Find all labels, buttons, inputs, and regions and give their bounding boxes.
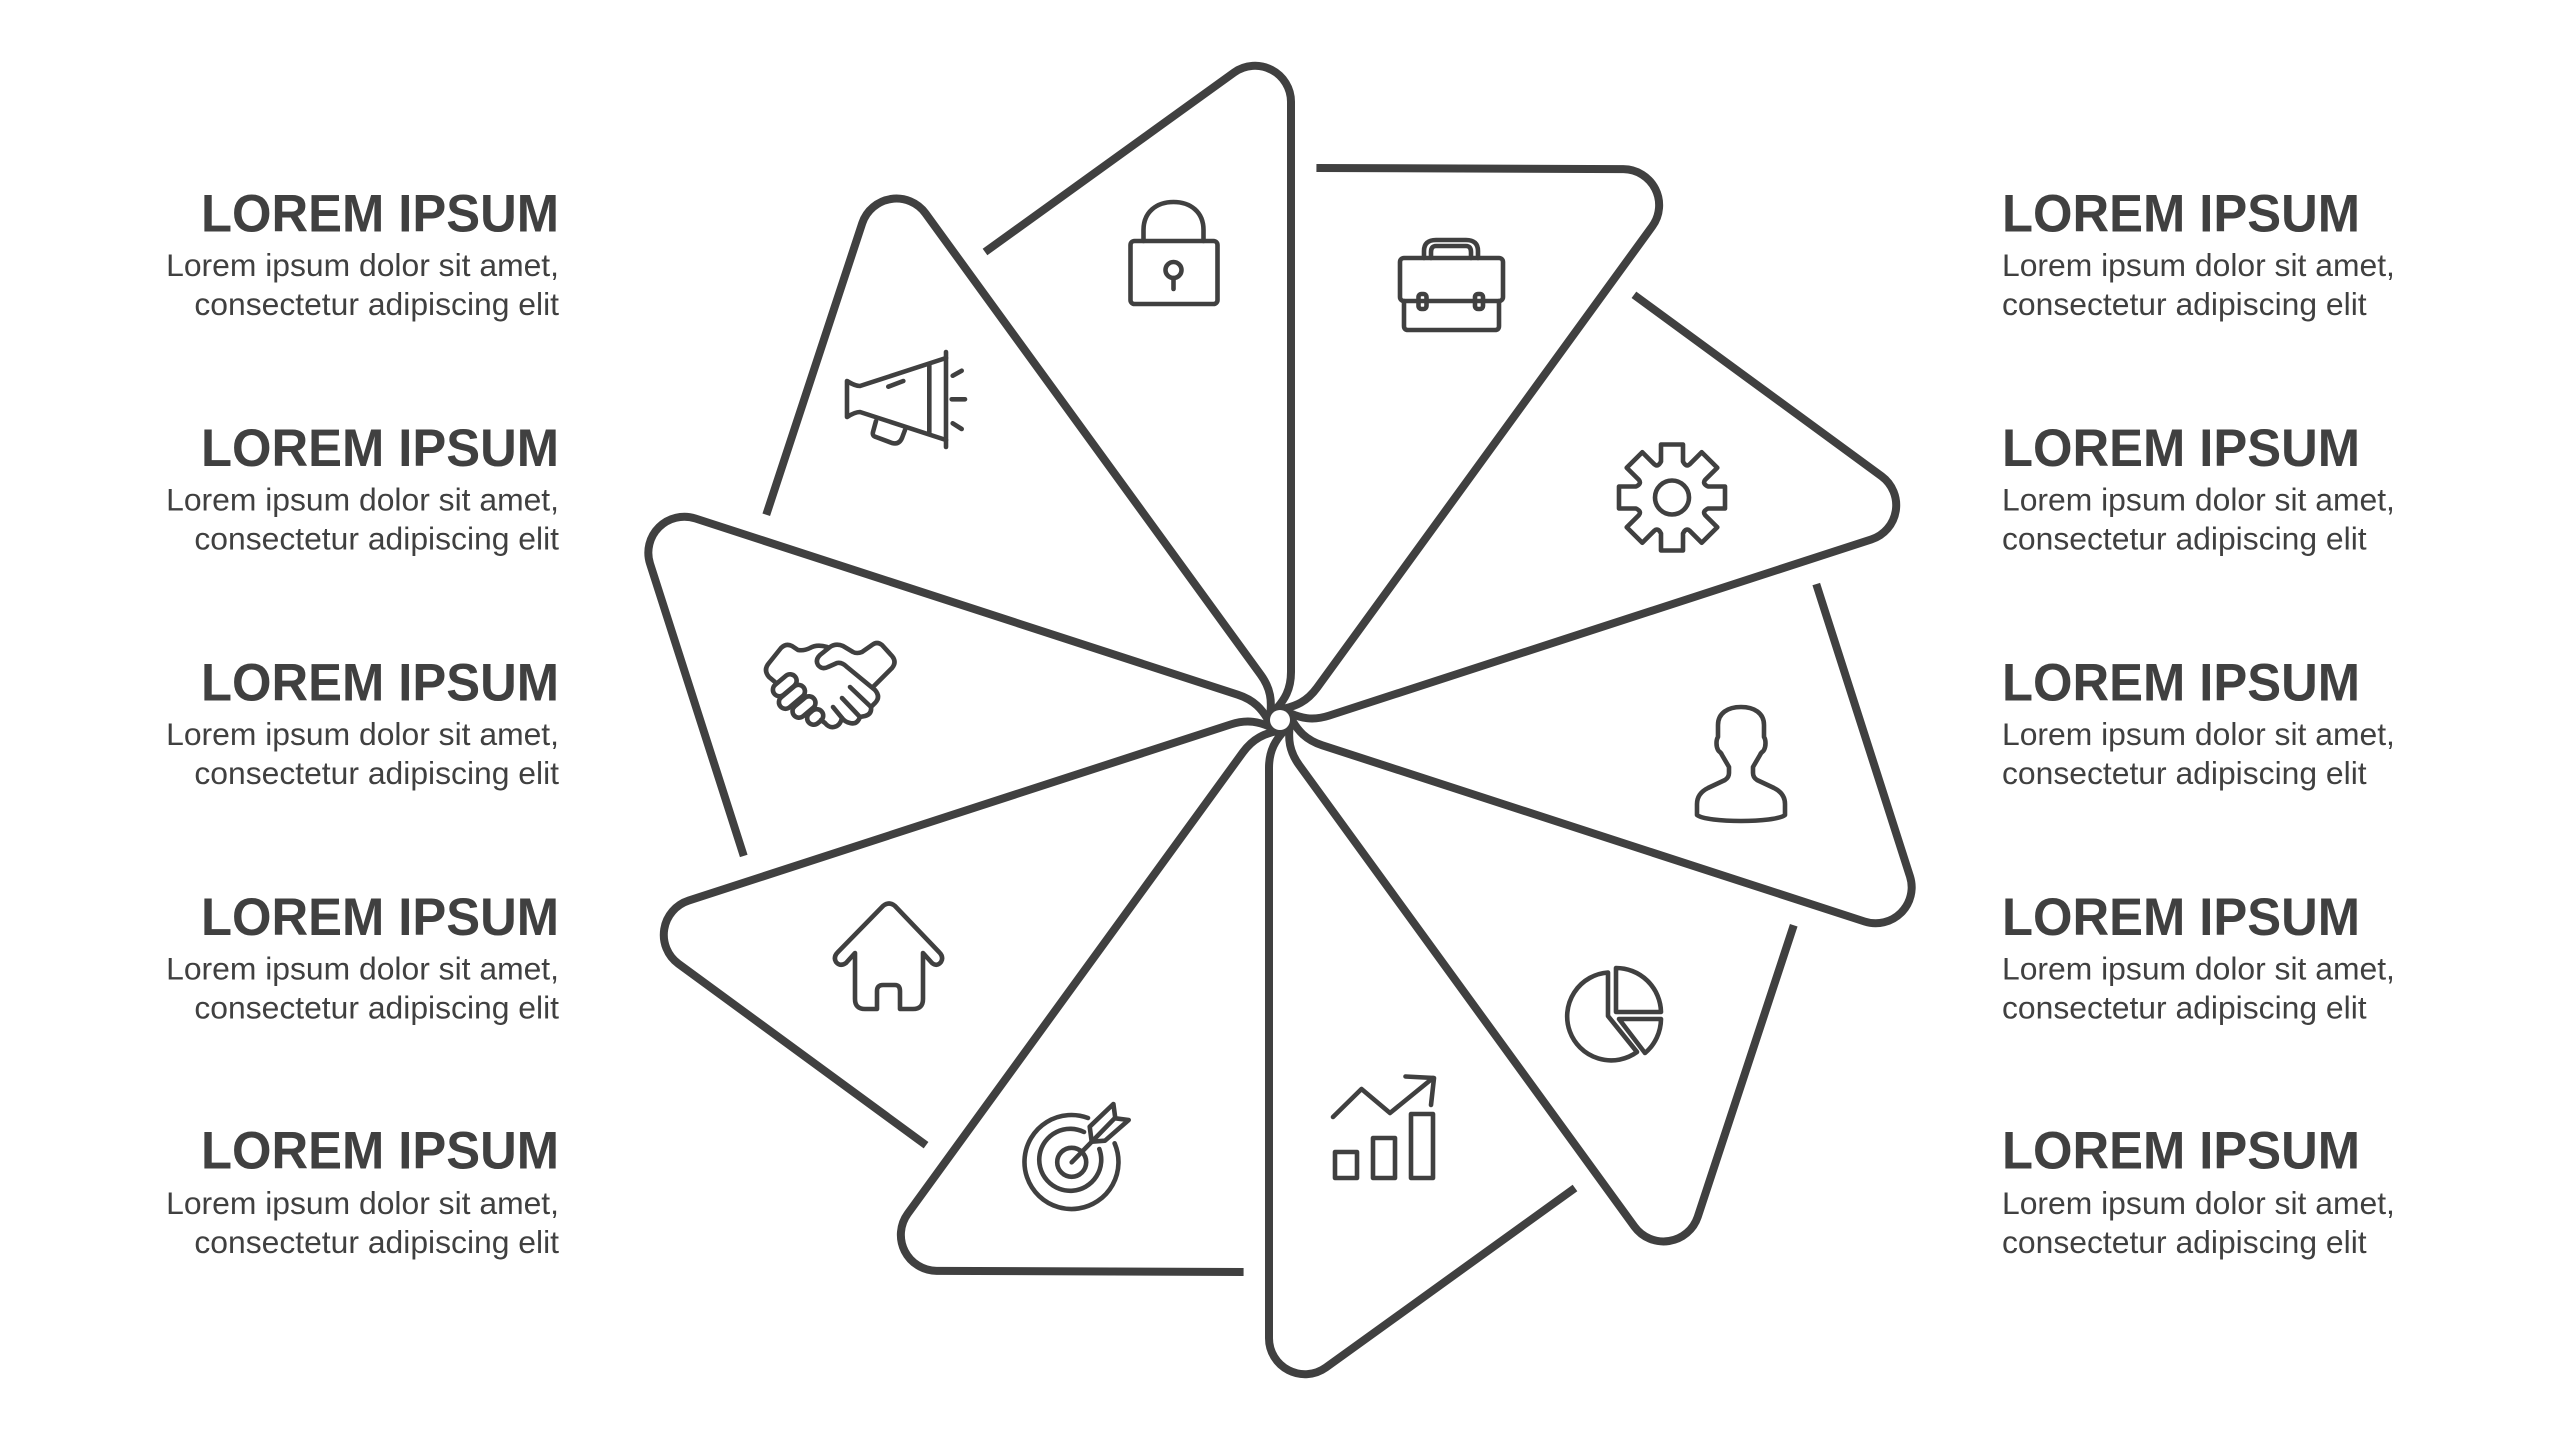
right text block 2: Lorem ipsum dolor sit amet, xyxy=(2002,482,2395,518)
right text block 5: Lorem ipsum dolor sit amet, xyxy=(2002,1185,2395,1221)
right text block 2: LOREM IPSUM xyxy=(2002,419,2360,478)
right text block 5: consectetur adipiscing elit xyxy=(2002,1224,2367,1260)
petal outline: pie chart xyxy=(1275,551,1903,1256)
right text block 1 xyxy=(2002,184,2395,322)
center hub hole xyxy=(1270,710,1290,730)
petal outline: bar chart xyxy=(1269,726,1575,1374)
right text block 1: LOREM IPSUM xyxy=(2002,184,2360,244)
left text block 5: LOREM IPSUM xyxy=(201,1122,559,1180)
icon: gear xyxy=(1619,444,1725,550)
right text block 1: consectetur adipiscing elit xyxy=(2002,286,2367,322)
left text block 4: LOREM IPSUM xyxy=(201,888,559,947)
left text block 2: LOREM IPSUM xyxy=(201,419,559,478)
right text block 4 xyxy=(2002,888,2395,1026)
petal outline: gear xyxy=(1195,237,1906,729)
icon: handshake xyxy=(766,643,894,727)
left text block 1: Lorem ipsum dolor sit amet, xyxy=(166,247,559,283)
right text block 3: Lorem ipsum dolor sit amet, xyxy=(2002,716,2395,752)
left text block 2 xyxy=(166,419,559,556)
left text block 5: consectetur adipiscing elit xyxy=(194,1224,559,1260)
left text block 4: consectetur adipiscing elit xyxy=(194,990,559,1026)
left text block 2: Lorem ipsum dolor sit amet, xyxy=(166,482,559,518)
petal outline: target xyxy=(887,718,1515,1423)
icon: megaphone xyxy=(847,352,965,447)
right text block 3 xyxy=(2002,654,2395,791)
left text block 3 xyxy=(166,654,559,791)
left text block 1: consectetur adipiscing elit xyxy=(194,286,559,322)
left text block 4 xyxy=(166,888,559,1026)
radial pinwheel diagram xyxy=(567,17,1993,1423)
petal outline: house xyxy=(654,711,1365,1203)
right text block 5: LOREM IPSUM xyxy=(2002,1122,2360,1180)
right text block 5 xyxy=(2002,1122,2395,1260)
icon: target with dart xyxy=(1024,1104,1129,1209)
left text block 2: consectetur adipiscing elit xyxy=(194,520,559,556)
left text block 1 xyxy=(166,184,559,322)
right text block 3: consectetur adipiscing elit xyxy=(2002,755,2367,791)
petal outline: handshake xyxy=(567,507,1278,999)
left text block 4: Lorem ipsum dolor sit amet, xyxy=(166,950,559,986)
icon: pie chart xyxy=(1567,968,1661,1060)
left text block 3: LOREM IPSUM xyxy=(201,654,559,712)
petal outline: person xyxy=(1282,441,1993,933)
petal outline: briefcase xyxy=(1045,17,1673,722)
right text block 2 xyxy=(2002,419,2395,556)
left text block 5: Lorem ipsum dolor sit amet, xyxy=(166,1185,559,1221)
right text block 4: LOREM IPSUM xyxy=(2002,888,2360,947)
left text block 3: Lorem ipsum dolor sit amet, xyxy=(166,716,559,752)
petal outline: megaphone xyxy=(657,184,1285,889)
icon: person xyxy=(1697,707,1785,821)
right text block 3: LOREM IPSUM xyxy=(2002,654,2360,712)
icon: house xyxy=(835,904,942,1009)
icon: bar chart with arrow xyxy=(1333,1076,1434,1178)
right text block 1: Lorem ipsum dolor sit amet, xyxy=(2002,247,2395,283)
left text block 3: consectetur adipiscing elit xyxy=(194,755,559,791)
right text block 2: consectetur adipiscing elit xyxy=(2002,520,2367,556)
left text block 1: LOREM IPSUM xyxy=(201,184,559,244)
left text block 5 xyxy=(166,1122,559,1260)
icon: lock xyxy=(1130,202,1218,304)
icon: briefcase xyxy=(1400,240,1503,330)
right text block 4: Lorem ipsum dolor sit amet, xyxy=(2002,950,2395,986)
right text block 4: consectetur adipiscing elit xyxy=(2002,990,2367,1026)
petal outline: lock xyxy=(985,66,1291,714)
